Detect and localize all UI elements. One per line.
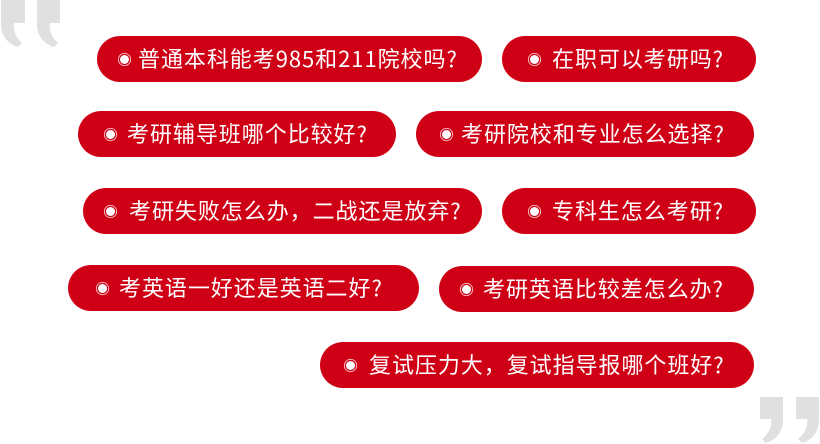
question pill 7 (68, 265, 419, 311)
question pill 6: 专科生怎么考研? (552, 194, 724, 226)
icon: closing quotation mark (760, 397, 819, 443)
question pill 5 (83, 188, 482, 234)
question pill 6 (502, 188, 756, 234)
icon: opening quotation mark (1, 0, 60, 47)
question pill 2: 在职可以考研吗? (552, 42, 724, 74)
question pill 3 (78, 111, 396, 157)
question pill 9: 复试压力大，复试指导报哪个班好? (369, 348, 725, 380)
question pill 2 (502, 36, 756, 82)
question pill 8 (439, 266, 754, 312)
question pill 4: 考研院校和专业怎么选择? (461, 117, 725, 149)
question pill 5: 考研失败怎么办，二战还是放弃? (129, 194, 462, 226)
question pill 4 (416, 111, 754, 157)
question pill 8: 考研英语比较差怎么办? (483, 272, 724, 304)
question pill 9 (320, 342, 754, 388)
question pill 7: 考英语一好还是英语二好? (119, 271, 383, 303)
question pill 3: 考研辅导班哪个比较好? (127, 117, 368, 149)
question pill 1 (97, 36, 482, 82)
question pill 1: 普通本科能考985和211院校吗? (138, 42, 458, 74)
